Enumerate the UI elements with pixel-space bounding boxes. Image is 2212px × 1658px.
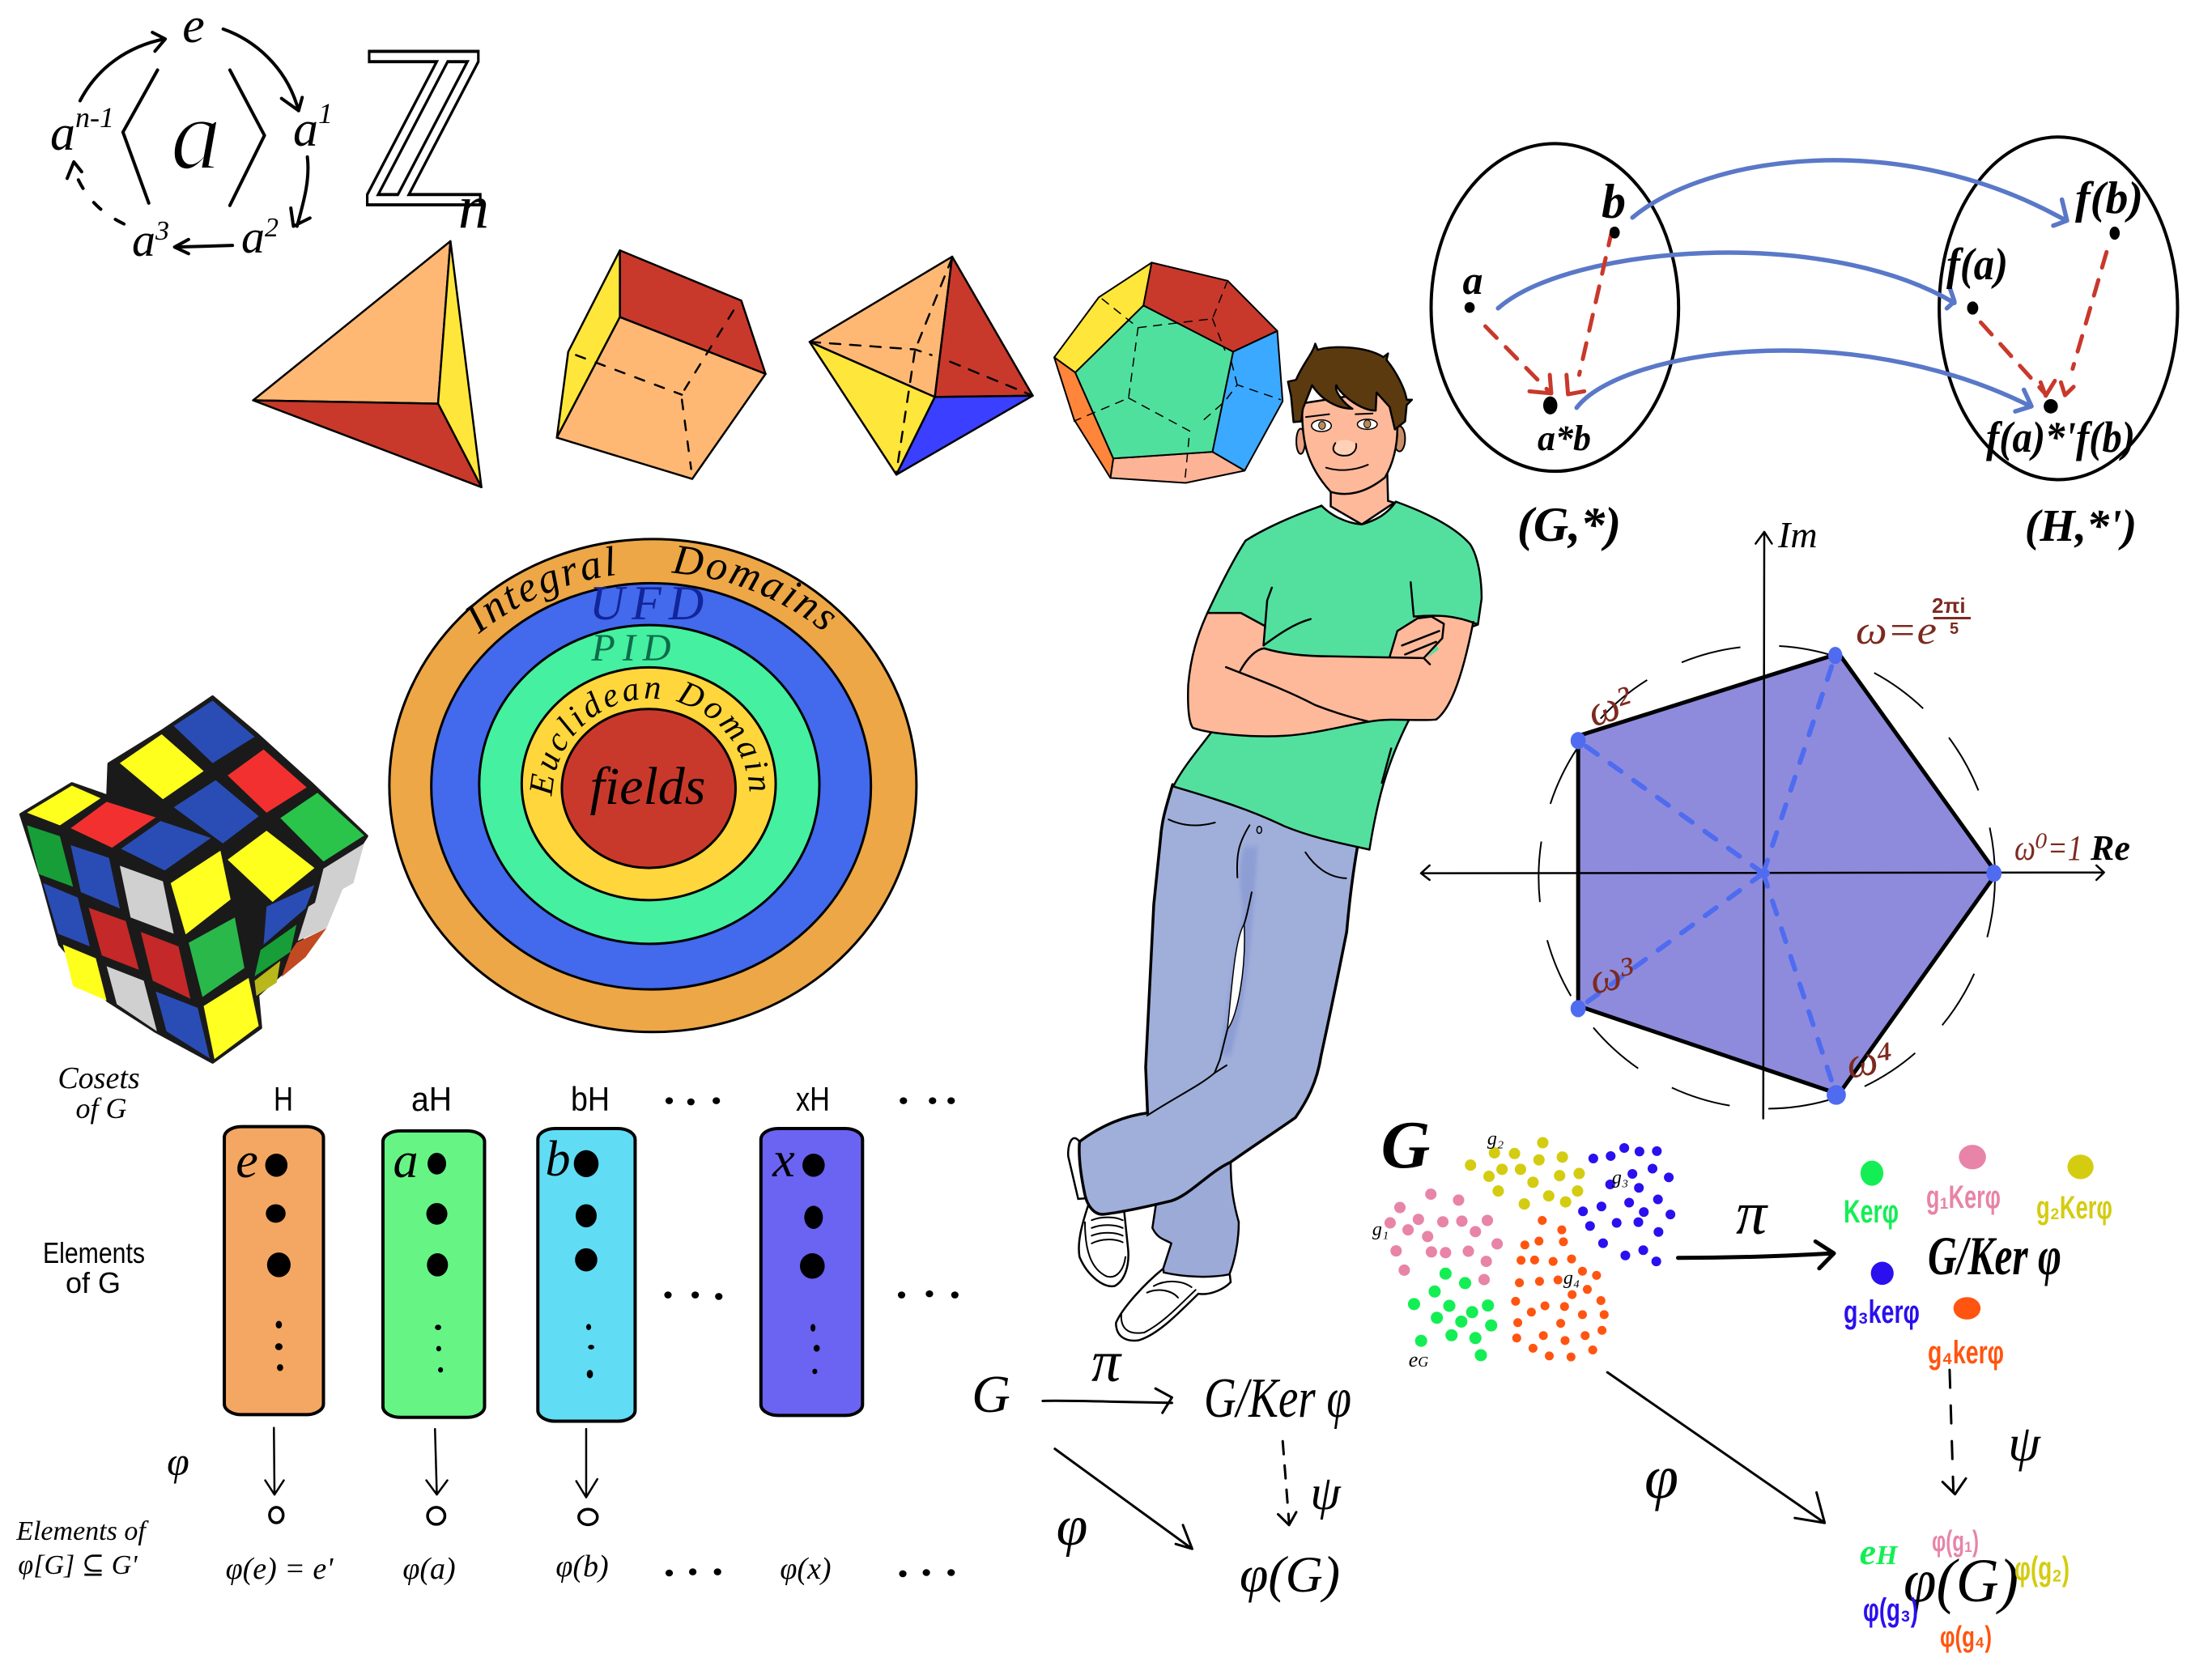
image labels: [226, 1550, 832, 1586]
label: a to the 1: a: [293, 102, 318, 157]
pentagon: [1578, 653, 1997, 1095]
label: G: G: [972, 1365, 1010, 1424]
label: phi g3: φ(g₃): [1863, 1592, 1918, 1628]
panel: cyclic group diagram: [50, 0, 333, 266]
image labels: φ(x): [780, 1552, 832, 1586]
label: a to the n minus 1: n-1: [75, 101, 114, 134]
ring: fields: [562, 709, 735, 868]
label: a*b: a*b: [1538, 419, 1591, 458]
label: phi g1: φ(g₁): [1932, 1524, 1979, 1558]
exponent divisor: 5: [1950, 620, 1959, 638]
icon: cube: [557, 250, 766, 479]
jeans: [1079, 784, 1358, 1214]
title symbol: Z n: ℤ: [359, 15, 488, 250]
dashed arrow: [1283, 1441, 1289, 1522]
set H: [1939, 137, 2177, 479]
label: identity e: e: [182, 0, 205, 53]
phi arrow: [1607, 1372, 1966, 1523]
label: G/Ker phi: G/Ker φ: [1204, 1367, 1351, 1430]
label: Cosets of G: [57, 1061, 140, 1124]
image labels: φ(e) = e': [226, 1552, 334, 1586]
label: psi: ψ: [1310, 1466, 1342, 1520]
label: Elements of G: of G: [66, 1266, 121, 1299]
panel: quotient group map: [1372, 1107, 2112, 1653]
panel: nested rings of integral domains: [388, 538, 918, 1033]
label: psi: ψ: [2008, 1414, 2041, 1472]
lower trouser leg: [1152, 1160, 1239, 1277]
label: phi of G: φ(G): [1904, 1547, 2018, 1615]
image labels: φ(b): [555, 1550, 609, 1584]
axes: [1421, 532, 2104, 1119]
small labels g1 to g4: eG: [1409, 1348, 1428, 1371]
pi arrow: [1678, 1241, 1834, 1269]
hair: [1288, 344, 1412, 429]
coset dots: blue: [1583, 1148, 1670, 1261]
coset representative labels: [236, 1132, 795, 1188]
coset dots: green: [1414, 1273, 1491, 1355]
ring: UFD: [432, 583, 871, 989]
coset dots: orange: [1516, 1221, 1604, 1357]
label: elements of image: φ[G] ⊆ G': [18, 1550, 138, 1580]
illustration: man with crossed arms: [1068, 344, 1482, 1341]
back shoe: [1068, 1138, 1129, 1286]
label: omega zero equals one: ω⁰=1: [2014, 828, 2082, 868]
image points: [270, 1507, 598, 1524]
label: a squared: 2: [265, 213, 279, 243]
image labels: φ(a): [402, 1552, 456, 1586]
icon: dodecahedron: [1054, 262, 1283, 483]
label: Cosets of G: of G: [76, 1092, 127, 1124]
label: PID: PID: [591, 627, 678, 670]
label: a cubed: a: [132, 214, 155, 266]
radii to roots: [1578, 656, 1836, 1095]
set G: [1431, 143, 1678, 471]
label: a to the n minus 1: a: [50, 106, 75, 161]
label: omega equals e to 2 pi i over 5: ω=e: [1856, 607, 1937, 653]
exponent bar: [1933, 617, 1971, 619]
label: a: a: [1462, 257, 1483, 303]
ring: Euclidean domain: [521, 667, 776, 900]
label: e H: eH: [1860, 1531, 1899, 1572]
label: g2 Ker phi: g₂Kerφ: [2036, 1190, 2112, 1226]
mapping arrows: [1498, 160, 2067, 411]
column headings: H: [274, 1080, 293, 1118]
label: b: b: [1602, 175, 1626, 228]
label: omega squared: ω²: [1581, 676, 1639, 736]
coset bar: bH: [538, 1129, 635, 1422]
crossed arms: [1188, 582, 1478, 783]
column headings: bH: [571, 1080, 610, 1118]
icon: Rubik's cube: [21, 697, 367, 1062]
label: G/Ker phi: G/Ker φ: [1928, 1225, 2061, 1286]
label: Elements of G: [43, 1236, 145, 1299]
psi dashed arrow: [1950, 1370, 1954, 1492]
icon: octahedron: [810, 257, 1033, 474]
label: f(b): f(b): [2075, 173, 2143, 223]
exponent: 2πi: [1932, 593, 1966, 618]
label: G: G: [1381, 1107, 1430, 1183]
label: pi: π: [1736, 1180, 1768, 1248]
label: fields: fields: [589, 757, 706, 816]
operation dashed arrows: [1486, 230, 2107, 394]
ellipsis dots: [664, 1097, 959, 1577]
label: (G,*): (G,*): [1517, 498, 1621, 551]
column headings: xH: [796, 1080, 830, 1118]
label: phi: φ: [1644, 1443, 1678, 1511]
coset representative labels: b: [546, 1132, 570, 1187]
coset bar: xH: [761, 1129, 862, 1415]
label: phi of G: φ(G): [1240, 1545, 1340, 1603]
label: Euclidean Domain: Euclidean Domain: [530, 682, 768, 797]
icon: tetrahedron: [253, 241, 482, 487]
panel: homomorphism between groups: [1431, 137, 2177, 551]
label: f(a): f(a): [1946, 240, 2008, 290]
small labels g1 to g4: g₄: [1563, 1268, 1580, 1289]
label: a cubed: 3: [155, 216, 169, 246]
subscript n: n: [458, 173, 489, 241]
coset representative labels: e: [236, 1133, 258, 1188]
coset dots: pink: [1390, 1194, 1497, 1280]
label: phi: φ: [1057, 1495, 1087, 1558]
unit circle: [1538, 646, 1995, 1108]
label: Ker phi: Kerφ: [1844, 1194, 1899, 1230]
phi arrows: [266, 1428, 598, 1498]
label: Re: Re: [2090, 828, 2130, 868]
column headings: aH: [411, 1080, 452, 1118]
label: g4 Ker phi: g₄kerφ: [1928, 1335, 2004, 1371]
quotient points: [1861, 1145, 2094, 1320]
label: g1 Ker phi: g₁Kerφ: [1926, 1180, 2001, 1215]
t-shirt: [1173, 502, 1482, 850]
coset representative labels: x: [772, 1133, 795, 1188]
ring: integral domains: [389, 539, 917, 1032]
label: a to the 1: 1: [318, 97, 333, 130]
label: a squared: a: [241, 210, 265, 263]
column headings: [274, 1080, 830, 1118]
label: elements of image: [15, 1516, 149, 1580]
ring: PID: [479, 625, 819, 944]
label: Integral Domains: Integral Domains: [466, 546, 836, 635]
label: g3 Ker phi: g₃kerφ: [1844, 1295, 1920, 1330]
small labels g1 to g4: [1372, 1129, 1628, 1371]
operation arrowheads: [1529, 375, 2074, 396]
coset bar: H: [224, 1127, 323, 1414]
coset bar: aH: [383, 1131, 484, 1418]
coset dots: yellow: [1470, 1143, 1579, 1204]
arrows: [1043, 1388, 1296, 1549]
label: phi g2: φ(g₂): [2014, 1550, 2069, 1588]
label: elements of image: Elements of: [15, 1516, 149, 1546]
label: Im: Im: [1777, 514, 1818, 555]
face: [1302, 389, 1397, 494]
root points: [1571, 647, 2001, 1105]
label: (H,*'): (H,*'): [2025, 501, 2137, 551]
label: f(a)*'f(b): f(a)*'f(b): [1986, 413, 2135, 461]
label: Elements of G: Elements: [43, 1236, 145, 1269]
label: UFD: UFD: [589, 576, 711, 630]
element points: [1465, 227, 2120, 414]
small labels g1 to g4: g₃: [1612, 1167, 1628, 1188]
panel: roots of unity on complex plane: [1421, 514, 2130, 1119]
label: phi g4: φ(g₄): [1940, 1620, 1992, 1653]
label: omega fourth: ω⁴: [1843, 1032, 1896, 1088]
neck and ears: [1296, 426, 1405, 525]
label: Cosets of G: Cosets: [57, 1061, 140, 1095]
coset representative labels: a: [393, 1133, 418, 1188]
label: generator a: a: [171, 79, 221, 191]
label: phi: φ: [167, 1439, 189, 1484]
label: pi: π: [1091, 1329, 1122, 1394]
element dots: [266, 1150, 825, 1379]
small labels g1 to g4: g₁: [1372, 1219, 1389, 1240]
small labels g1 to g4: g₂: [1487, 1129, 1504, 1150]
panel: first isomorphism triangle: [972, 1329, 1351, 1603]
label: omega cubed: ω³: [1585, 947, 1639, 1004]
front shoe: [1116, 1269, 1231, 1341]
panel: cosets table: [15, 1061, 959, 1586]
